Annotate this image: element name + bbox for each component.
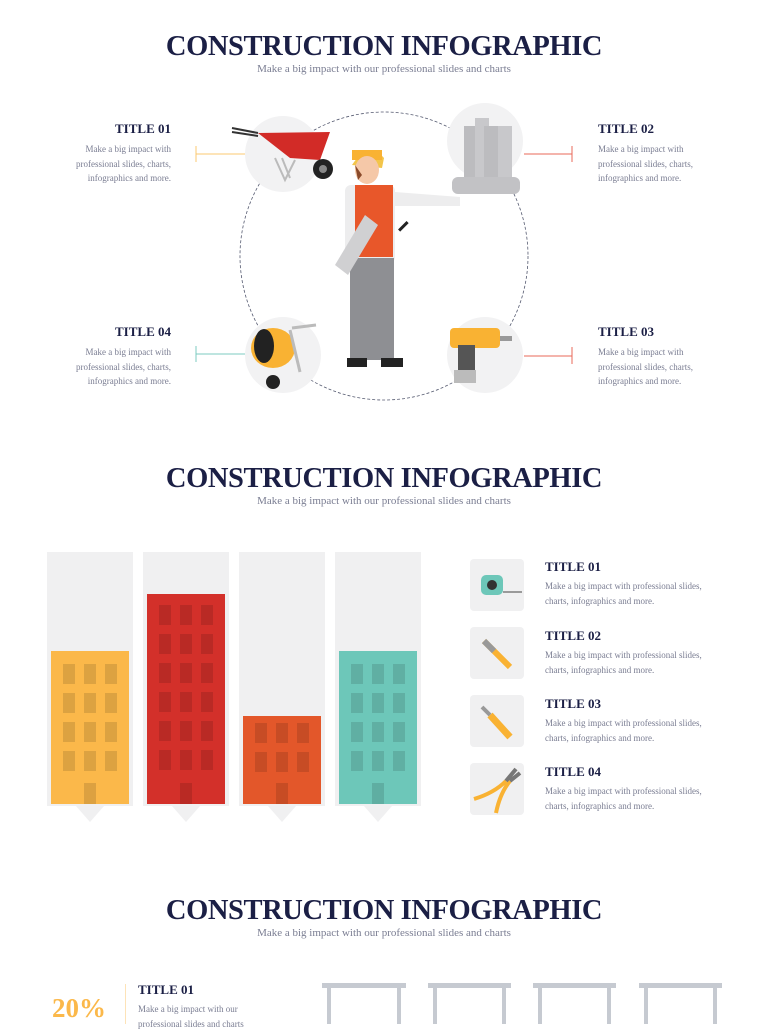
figure: worker xyxy=(335,150,460,367)
subtitle 1: Make a big impact with our professional slides and charts xyxy=(257,63,511,75)
text: title 04 xyxy=(76,324,171,386)
text: title 01 xyxy=(76,121,171,183)
text: title 02: TITLE 02 xyxy=(598,121,654,136)
title 2: CONSTRUCTION INFOGRAPHIC xyxy=(166,463,602,494)
icon: tape measure xyxy=(470,559,524,611)
title 1: CONSTRUCTION INFOGRAPHIC xyxy=(166,31,602,62)
bar: red xyxy=(147,594,225,804)
text items: TITLE 01 xyxy=(545,559,601,574)
divider line xyxy=(125,984,126,1024)
text: stat title: Make a big impact with our xyxy=(138,1004,238,1014)
text: title 03: Make a big impact with xyxy=(598,347,683,357)
text: title 04: TITLE 04 xyxy=(115,324,171,339)
icon: drill xyxy=(447,317,523,393)
text: title 04: professional slides, charts, xyxy=(76,362,171,372)
text: stat title: professional slides and charts xyxy=(138,1018,244,1028)
text: title 02 xyxy=(598,121,693,183)
text: stat title: TITLE 01 xyxy=(138,982,194,997)
text: title 01: professional slides, charts, xyxy=(76,158,171,168)
bar: orange xyxy=(243,716,321,804)
subtitle 3: Make a big impact with our professional slides and charts xyxy=(257,927,511,939)
text: title 01: infographics and more. xyxy=(88,173,171,183)
chart: building bars xyxy=(47,552,421,822)
icon: pliers xyxy=(470,763,524,815)
text: title 02: infographics and more. xyxy=(598,173,681,183)
text: title 01: Make a big impact with xyxy=(86,144,171,154)
icon: pipes xyxy=(447,103,523,194)
icon: cutter xyxy=(470,695,524,747)
text: title 03 xyxy=(598,324,693,386)
text items: charts, infographics and more. xyxy=(545,596,654,606)
text: title 02: Make a big impact with xyxy=(598,144,683,154)
list: tools: charts, infographics and more. xyxy=(545,800,654,810)
text items: Make a big impact with professional slides, xyxy=(545,581,702,591)
list: tools: charts, infographics and more. xyxy=(545,732,654,742)
text: title 01: TITLE 01 xyxy=(115,121,171,136)
list: tools xyxy=(470,559,702,815)
list: tools: TITLE 04 xyxy=(545,764,601,779)
list: tools: TITLE 03 xyxy=(545,696,601,711)
chart: tables xyxy=(322,983,722,1024)
title 3: CONSTRUCTION INFOGRAPHIC xyxy=(166,895,602,926)
stat: 20%: 20% xyxy=(52,993,106,1023)
list: tools: charts, infographics and more. xyxy=(545,664,654,674)
list: tools: Make a big impact with professional slides, xyxy=(545,718,702,728)
text: title 04: infographics and more. xyxy=(88,376,171,386)
list: tools: Make a big impact with professional slides, xyxy=(545,650,702,660)
bar: yellow xyxy=(51,651,129,804)
subtitle 2: Make a big impact with our professional slides and charts xyxy=(257,495,511,507)
text items xyxy=(545,559,702,606)
icon: wrench xyxy=(470,627,524,679)
panel: worker diagram xyxy=(196,103,572,400)
text: stat title xyxy=(138,982,244,1029)
text: title 04: Make a big impact with xyxy=(86,347,171,357)
text: title 03: professional slides, charts, xyxy=(598,362,693,372)
connectors xyxy=(196,146,245,162)
list: tools: TITLE 02 xyxy=(545,628,601,643)
list: tools: Make a big impact with professional slides, xyxy=(545,786,702,796)
bar: teal xyxy=(339,651,417,804)
icon: cement mixer xyxy=(245,317,321,393)
text: title 03: TITLE 03 xyxy=(598,324,654,339)
text: title 03: infographics and more. xyxy=(598,376,681,386)
icon: wheelbarrow xyxy=(232,116,333,192)
text: title 02: professional slides, charts, xyxy=(598,158,693,168)
